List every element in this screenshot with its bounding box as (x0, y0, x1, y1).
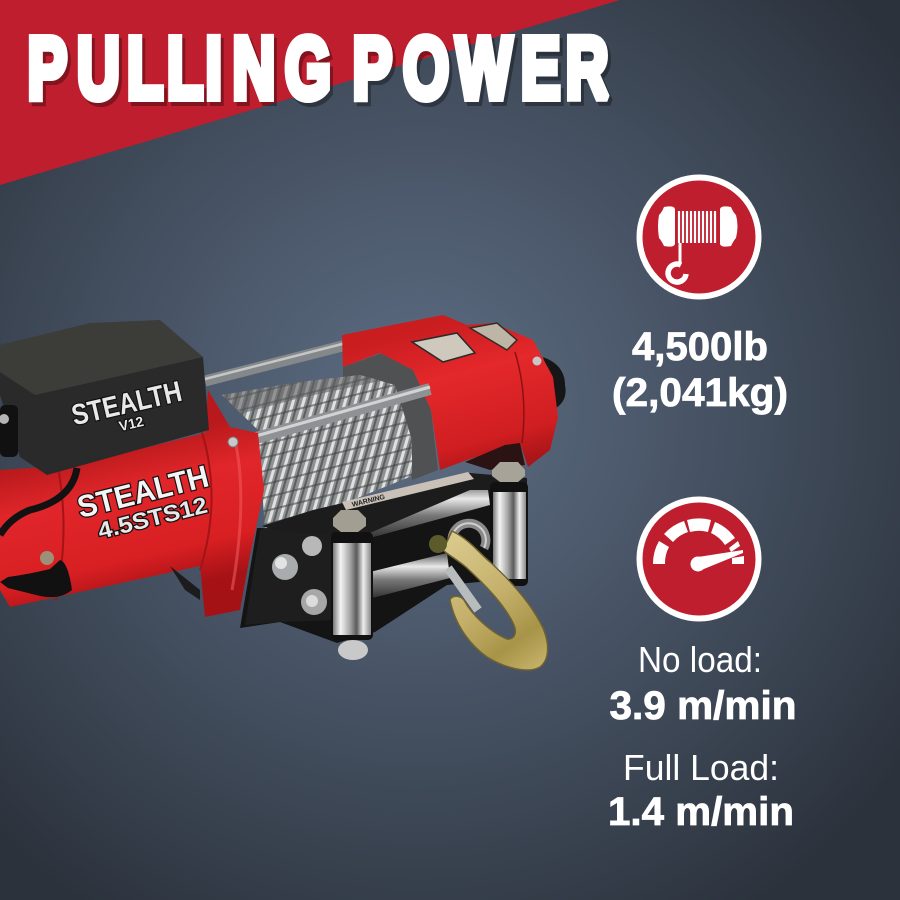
load capacity text: (2,041kg) (612, 371, 788, 415)
motor bolt (532, 356, 542, 366)
housing seam (515, 352, 524, 443)
terminal boot (0, 551, 72, 597)
red corner banner (0, 0, 620, 185)
bracket bolts (272, 536, 327, 615)
horizontal rollers (368, 482, 490, 598)
right vertical roller (490, 462, 528, 586)
drum flanges (658, 206, 738, 247)
emblem: motor: STEALTH (74, 459, 212, 525)
icon: cable drum and hook (640, 178, 758, 296)
lower tie rod (256, 389, 430, 438)
emblem: control box (69, 376, 188, 444)
no load speed text (610, 639, 796, 728)
emblem: motor: 4.5STS12 (95, 492, 210, 544)
left connector bolts (0, 405, 18, 457)
motor foot shadow (170, 566, 200, 600)
warning label (342, 472, 474, 510)
hook shape (668, 264, 686, 282)
upper tie rod (205, 342, 350, 381)
left vertical roller (331, 510, 373, 660)
full load speed text: 1.4 m/min (608, 790, 794, 834)
bracket side plate (245, 518, 340, 625)
title: PULLING POWER (28, 20, 608, 117)
power cable (0, 468, 77, 535)
left motor body (0, 390, 264, 617)
end knob (543, 357, 566, 408)
no load speed text: No load: (638, 639, 762, 680)
control box (0, 320, 209, 475)
rope loop (452, 523, 486, 550)
motor bolt (228, 437, 238, 447)
motor mount foot (465, 443, 525, 470)
cable drum (222, 375, 412, 530)
hook (443, 531, 548, 670)
load capacity text (612, 325, 788, 415)
rating sticker (412, 333, 475, 362)
full load speed text: Full Load: (623, 747, 779, 788)
icon: speedometer (640, 500, 758, 618)
right motor housing (342, 315, 558, 470)
hook latch (448, 568, 478, 610)
gauge hub (690, 556, 706, 572)
hook line (678, 243, 682, 264)
emblem: control box: STEALTH (69, 376, 185, 432)
grey drum ring (343, 352, 438, 480)
no load speed text: 3.9 m/min (610, 684, 796, 728)
load capacity text: 4,500lb (632, 325, 768, 369)
emblem: control box: V12 (117, 413, 145, 434)
gauge needle (698, 550, 743, 571)
gauge segments (653, 518, 744, 564)
warning text: WARNING (351, 494, 386, 509)
full load speed text (608, 747, 794, 834)
motor rib highlights (56, 432, 212, 600)
drum shading (222, 375, 380, 414)
winch product illustration (0, 315, 566, 670)
fairlead bracket (240, 480, 500, 643)
gauge sticker (470, 323, 517, 350)
top plate (262, 473, 527, 535)
rope turns (679, 211, 715, 243)
hook pin (429, 535, 447, 553)
